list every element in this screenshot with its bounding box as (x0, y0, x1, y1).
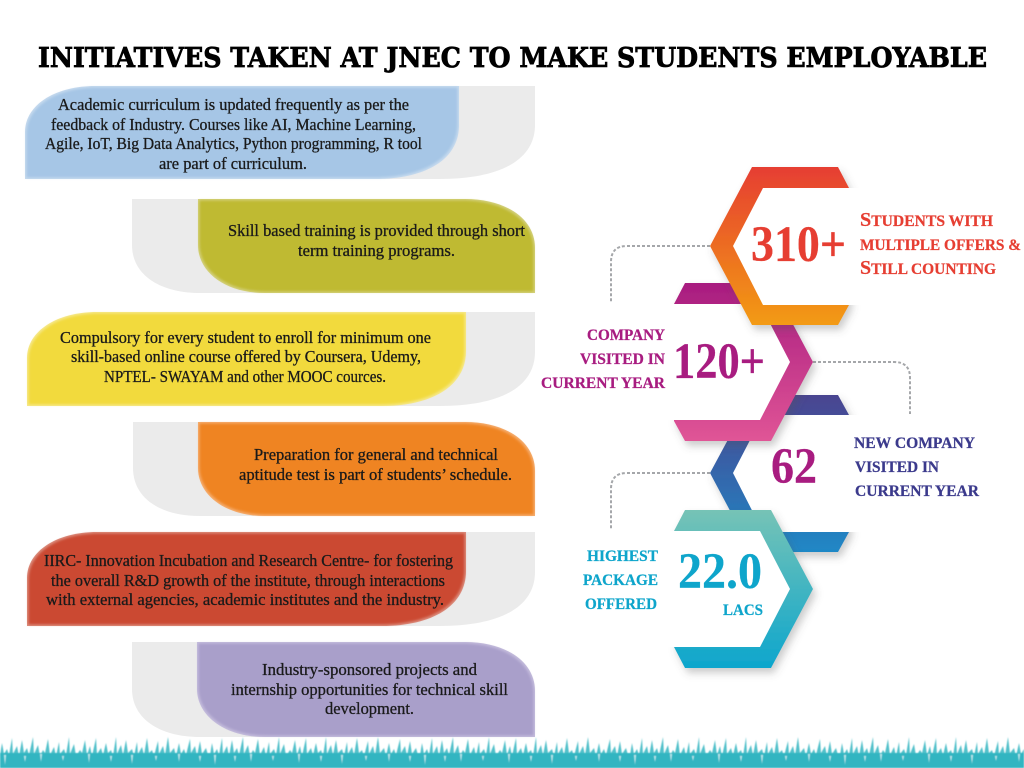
number: 22.0: 22.0 (678, 544, 762, 600)
panel: skill based training (132, 199, 535, 293)
title: INITIATIVES TAKEN AT JNEC TO MAKE STUDENTS EMPLOYABLE (38, 43, 987, 74)
label: company visited: CURRENT YEAR (541, 375, 666, 392)
label: company visited: VISITED IN (580, 351, 665, 368)
panel text: online courses: skill-based online course offered by Coursera, Udemy, (71, 347, 421, 366)
panel text: IIRC: IIRC- Innovation Incubation and Research Centre- for fostering (44, 551, 453, 570)
panel text: curriculum: Agile, IoT, Big Data Analytics, Python programming, R tool (45, 134, 422, 153)
panel text: curriculum: Academic curriculum is updated frequently as per the (58, 95, 409, 114)
panel text: online courses: NPTEL- SWAYAM and other MOOC cources. (104, 367, 386, 386)
label: highest package offered: HIGHEST (587, 548, 659, 565)
panel text: industry projects (231, 660, 508, 718)
number: 120+: 120+ (673, 334, 765, 390)
panel: academic curriculum (25, 86, 535, 179)
label: highest package offered: OFFERED (585, 596, 657, 613)
panel text: skill training: term training programs. (298, 241, 455, 260)
hexagon: 310+ students (710, 167, 870, 325)
connector: 62 to 22.0 (611, 473, 710, 530)
panel text: curriculum: are part of curriculum. (159, 154, 307, 173)
panel text: IIRC: with external agencies, academic institutes and the industry. (46, 590, 444, 609)
panel text: curriculum: feedback of Industry. Courses like AI, Machine Learning, (51, 115, 416, 134)
panel: online courses (27, 312, 535, 406)
panel: IIRC research centre (27, 532, 535, 626)
label: highest package offered: PACKAGE (583, 572, 658, 589)
panel text: industry projects: Industry-sponsored projects and (262, 660, 478, 679)
panel text: skill training (228, 221, 525, 260)
label: new company visited: NEW COMPANY (854, 435, 975, 452)
panel text: IIRC (44, 551, 453, 609)
panel text: IIRC: the overall R&D growth of the institute, through interactions (51, 571, 445, 590)
hexagon: 120+ companies (660, 283, 813, 441)
label: new company visited (854, 435, 980, 500)
unit: LACS: LACS (723, 602, 763, 619)
label: company visited (541, 327, 666, 392)
panel text: aptitude: aptitude test is part of students’ schedule. (239, 465, 512, 484)
panel: aptitude preparation (133, 422, 535, 516)
number: 310+: 310+ (751, 217, 846, 273)
label: highest package offered (583, 548, 659, 613)
label: students with multiple offers: STILL COUNTING (860, 257, 996, 279)
panel: industry projects (132, 642, 535, 737)
panel text: skill training: Skill based training is provided through short (228, 221, 525, 240)
number: 62: 62 (771, 439, 817, 495)
panel text: curriculum (45, 95, 422, 173)
label: new company visited: CURRENT YEAR (855, 483, 980, 500)
panel text: aptitude: Preparation for general and technical (254, 445, 498, 464)
panel text: industry projects: development. (325, 699, 414, 718)
connector: 120+ to 62 (813, 362, 910, 414)
panel text: aptitude (239, 445, 512, 484)
panel text: online courses: Compulsory for every student to enroll for minimum one (60, 328, 431, 347)
connector: 310+ to 120+ (611, 246, 710, 303)
panel text: industry projects: internship opportunities for technical skill (231, 680, 508, 699)
label: students with multiple offers: MULTIPLE OFFERS & (860, 237, 1021, 254)
hexagon: 22.0 package (660, 510, 813, 668)
grass strip (0, 737, 1024, 768)
hexagon: 62 new companies (710, 395, 870, 552)
panel text: online courses (60, 328, 431, 386)
label: students with multiple offers: STUDENTS WITH (860, 209, 993, 231)
label: students with multiple offers (860, 209, 1021, 279)
label: new company visited: VISITED IN (855, 459, 939, 476)
label: company visited: COMPANY (587, 327, 665, 344)
